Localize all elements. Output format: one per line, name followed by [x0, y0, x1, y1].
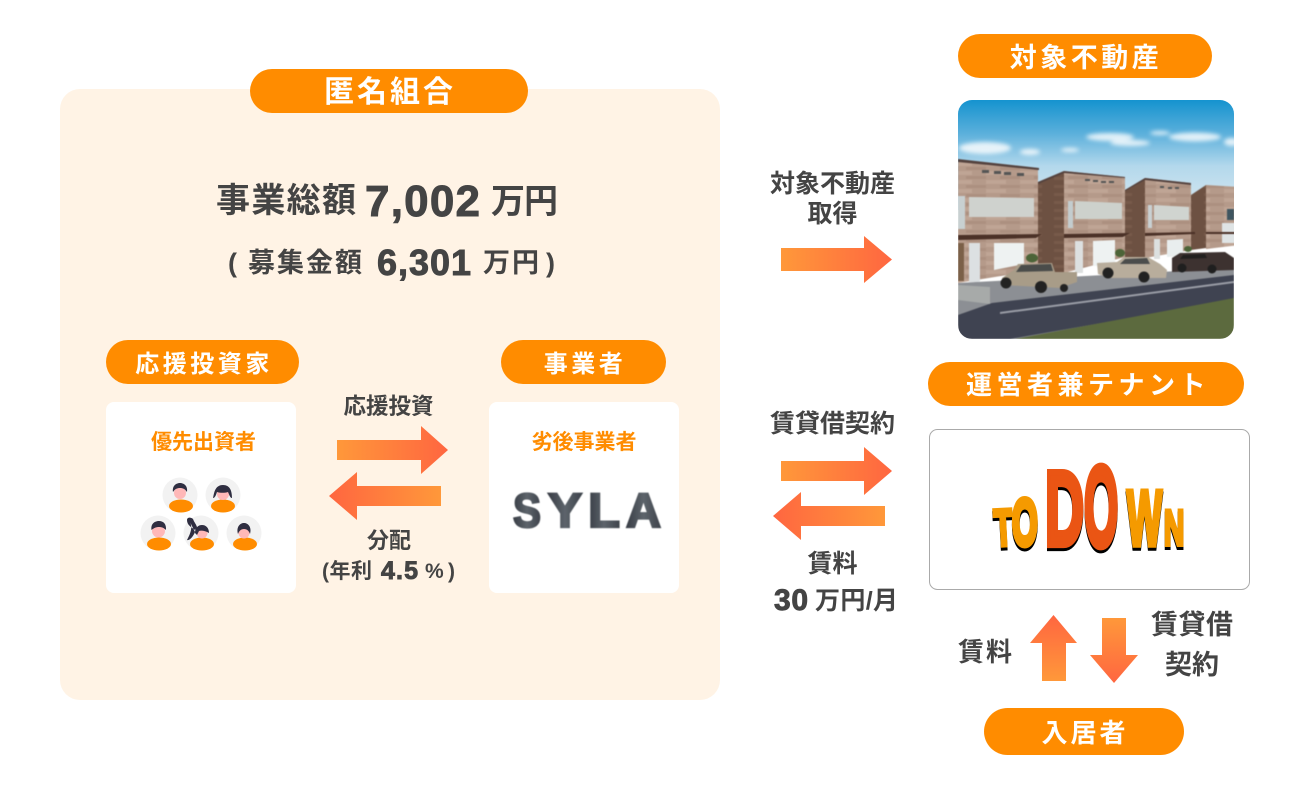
logo: TODOWN: T	[993, 499, 1014, 557]
label: 対象不動産取得: 取得	[807, 200, 858, 228]
pill: 運営者兼テナント	[928, 362, 1244, 406]
logo: SYLA: L	[588, 485, 620, 538]
label: 年利 4.5%: 4.5	[381, 557, 418, 585]
pill: 応援投資家: 応援投資家	[135, 351, 273, 378]
label: 賃貸借契約	[1151, 610, 1233, 680]
label: 賃貸借契約: 賃貸借契約	[770, 410, 895, 438]
logo: SYLA: A	[626, 485, 661, 538]
heading pill: 匿名組合: 匿名組合	[324, 76, 456, 109]
building 1	[958, 160, 1038, 283]
logo: SYLA: Y	[548, 485, 582, 538]
label: 賃料 30万円/月	[774, 550, 898, 617]
pill: 対象不動産: 対象不動産	[1010, 43, 1162, 73]
building 2	[1038, 171, 1064, 272]
label: 応援投資: 応援投資	[343, 394, 434, 419]
logo: TODOWN	[993, 444, 1184, 571]
pill: 入居者: 入居者	[1041, 718, 1129, 748]
label: 分配: 分配	[367, 528, 411, 553]
arrow: 分配 left	[329, 472, 441, 520]
pill: 入居者	[984, 708, 1184, 755]
pill: 運営者兼テナント: 運営者兼テナント	[966, 370, 1210, 400]
label: 賃料 30万円/月: 30	[774, 584, 808, 617]
logo: TODOWN: O	[1012, 487, 1038, 560]
label: 賃料 30万円/月: 賃料	[807, 550, 858, 578]
pill: 応援投資家	[106, 340, 299, 384]
arrow: 賃料 left	[773, 492, 885, 540]
text: 募集金額: )	[546, 248, 555, 278]
building 4	[1191, 185, 1206, 250]
card heading: 劣後事業者: 劣後事業者	[532, 430, 636, 454]
logo: TODOWN: W	[1127, 475, 1162, 562]
logo: SYLA: S	[513, 485, 541, 538]
label: 賃貸借契約: 賃貸借	[1151, 610, 1233, 640]
logo: SYLA	[513, 485, 661, 538]
logo: TODOWN: N	[1164, 499, 1184, 556]
text: 募集金額: 6,301	[377, 242, 471, 283]
pill: 事業者: 事業者	[544, 351, 626, 378]
image: 対象不動産 rendering	[958, 100, 1240, 339]
label: 対象不動産取得: 対象不動産	[770, 170, 895, 198]
pill: 事業者	[501, 340, 666, 384]
panel: TODOWN logo	[930, 430, 1250, 590]
text: 募集金額: 募集金額	[248, 248, 362, 278]
arrow: 対象不動産取得	[781, 236, 892, 283]
label: 年利 4.5%: (年利	[322, 560, 372, 583]
label: 賃料 30万円/月: 万円/月	[815, 587, 898, 615]
card heading: 優先出資者: 優先出資者	[151, 431, 256, 454]
text: 事業総額: 事業総額	[216, 182, 356, 220]
building 3	[1125, 178, 1145, 258]
text: 事業総額: 万円	[491, 183, 558, 221]
text: 募集金額	[228, 242, 555, 283]
card: 優先出資者	[106, 402, 296, 593]
ground	[958, 268, 1234, 339]
icon: investors group	[140, 478, 262, 550]
label: 対象不動産取得	[770, 170, 895, 228]
text: 事業総額: 7,002	[365, 177, 480, 226]
arrow: up	[1030, 615, 1077, 681]
logo: TODOWN: D	[1045, 449, 1084, 568]
trucks	[1000, 263, 1077, 293]
arrow: 賃貸借契約 right	[781, 447, 892, 495]
arrow: 応援投資 right	[337, 426, 448, 474]
label: 賃貸借契約: 契約	[1165, 650, 1219, 680]
label: 年利 4.5%	[322, 557, 455, 585]
road	[958, 275, 1234, 339]
panel: 匿名組合	[60, 69, 720, 700]
label: 年利 4.5%: %)	[425, 560, 455, 583]
heading pill: 匿名組合	[250, 69, 528, 113]
text: 募集金額: 万円	[483, 248, 539, 278]
text: 事業総額	[216, 177, 558, 226]
card: 劣後事業者	[489, 402, 679, 593]
lawn	[1015, 298, 1234, 339]
label: 賃料: 賃料	[958, 637, 1012, 667]
text: 募集金額: (	[228, 248, 237, 278]
pill: 対象不動産	[958, 34, 1212, 78]
arrow: down	[1090, 618, 1138, 683]
logo: TODOWN: O	[1084, 444, 1118, 571]
